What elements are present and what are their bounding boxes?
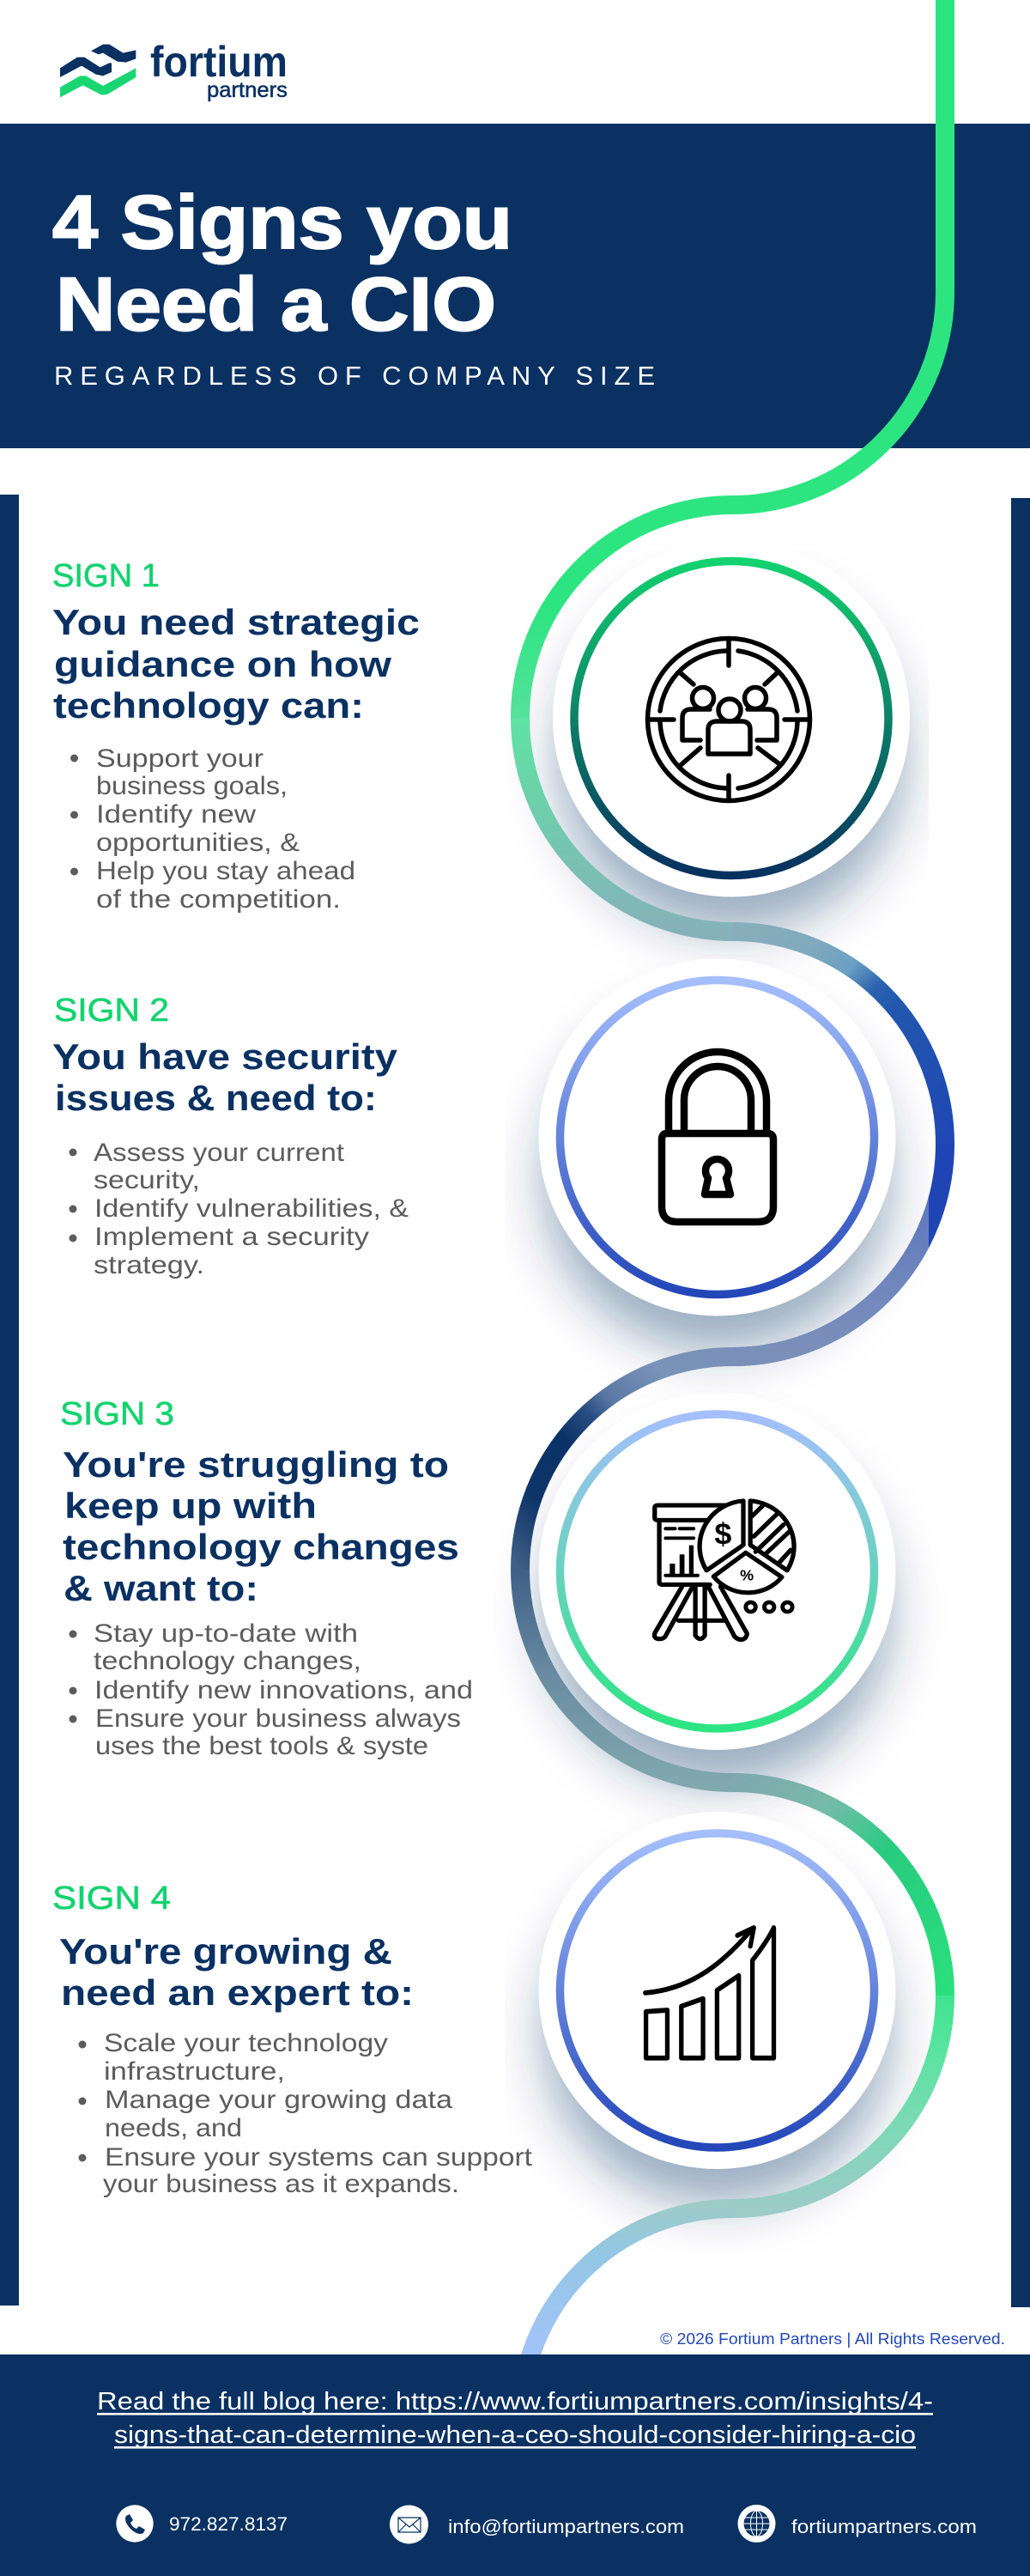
panel: sign 4 <box>52 1812 896 2198</box>
copyright note: © 2026 Fortium Partners | All Rights Reserved. <box>660 2330 1005 2348</box>
sign 1 bullet list: of the competition. <box>96 885 341 914</box>
logo <box>60 38 288 102</box>
icon: phone <box>116 2505 154 2543</box>
icon: presentation board with pie chart: % <box>740 1567 754 1584</box>
contact: phone <box>116 2505 288 2543</box>
title: 4 Signs you <box>52 179 512 264</box>
sign 3 bullet list: Stay up-to-date with <box>94 1619 358 1648</box>
sign 1 bullet list: Help you stay ahead <box>96 857 355 885</box>
sign 4 heading: need an expert to: <box>61 1972 414 2013</box>
sign 2 bullet list: strategy. <box>94 1251 204 1279</box>
sign 3 bullet list: technology changes, <box>94 1647 361 1675</box>
icon: padlock <box>662 1052 773 1222</box>
sign 3 heading <box>63 1444 459 1608</box>
sign 4 circle badge <box>539 1812 896 2169</box>
icon: presentation board with pie chart: $ <box>714 1518 732 1551</box>
contact: email: info@fortiumpartners.com <box>448 2516 684 2537</box>
sign 3 heading: & want to: <box>64 1568 258 1608</box>
sign 4 heading: You're growing & <box>59 1931 392 1971</box>
sign 1 bullet list <box>70 744 355 914</box>
sign 2 heading: You have security <box>52 1036 398 1077</box>
icon: envelope <box>390 2506 428 2543</box>
sign 1 bullet list: business goals, <box>96 772 288 800</box>
sign 2 bullet list: security, <box>94 1166 200 1194</box>
sign 4 label: SIGN 4 <box>52 1880 171 1917</box>
sign 3 bullet list <box>69 1619 473 1760</box>
panel: sign 2 <box>52 958 896 1315</box>
sign 3 circle badge <box>539 1393 896 1750</box>
sign 1 heading: You need strategic <box>52 602 420 642</box>
sign 1 bullet list: Identify new <box>96 800 256 829</box>
contact: website <box>738 2505 977 2543</box>
sign 1 bullet list: Support your <box>96 744 264 773</box>
sign 4 bullet list: Manage your growing data <box>105 2086 452 2114</box>
sign 2 bullet list: Assess your current <box>94 1139 345 1167</box>
right side bar <box>1011 498 1030 2307</box>
icon: target with people <box>647 639 810 800</box>
sign 2 bullet list: Implement a security <box>94 1223 369 1251</box>
sign 3 label: SIGN 3 <box>60 1396 174 1432</box>
blog link: Read the full blog here: https://www.fortiumpartners.com/insights/4- <box>97 2388 933 2415</box>
sign 4 bullet list: Ensure your systems can support <box>105 2143 533 2172</box>
logo mark <box>60 45 136 97</box>
sign 2 circle badge <box>539 958 896 1315</box>
sign 2 heading <box>52 1036 398 1118</box>
sign 4 heading <box>59 1931 414 2013</box>
panel: sign 3 <box>60 1393 896 1760</box>
sign 4 bullet list <box>79 2029 533 2198</box>
sign 1 circle badge <box>553 539 910 896</box>
blog link: signs-that-can-determine-when-a-ceo-should-consider-hiring-a-cio <box>114 2421 916 2449</box>
sign 2 label: SIGN 2 <box>54 993 169 1029</box>
footer band <box>0 2354 1030 2576</box>
title: Need a CIO <box>56 261 496 347</box>
panel: sign 1 <box>52 539 910 914</box>
winding gradient path <box>520 0 945 2421</box>
sign 4 bullet list: infrastructure, <box>104 2057 285 2086</box>
title <box>52 179 512 347</box>
blog link <box>97 2388 933 2449</box>
contact: email <box>390 2506 684 2543</box>
sign 3 bullet list: uses the best tools & syste <box>95 1732 428 1760</box>
sign 1 label: SIGN 1 <box>52 558 160 594</box>
sign 2 heading: issues & need to: <box>55 1078 377 1118</box>
sign 1 heading <box>52 602 420 726</box>
sign 4 bullet list: your business as it expands. <box>103 2170 459 2198</box>
sign 4 bullet list: needs, and <box>105 2114 242 2142</box>
sign 3 bullet list: Ensure your business always <box>95 1704 461 1733</box>
sign 3 heading: technology changes <box>63 1527 459 1567</box>
circle drop shadows <box>544 586 905 2205</box>
left side bar <box>0 495 19 2306</box>
logo wordmark: fortium <box>150 38 288 86</box>
sign 4 bullet list: Scale your technology <box>104 2029 388 2057</box>
header band <box>0 124 1030 448</box>
subtitle: REGARDLESS OF COMPANY SIZE <box>54 361 655 391</box>
sign 3 bullet list: Identify new innovations, and <box>94 1676 473 1704</box>
sign 1 bullet list: opportunities, & <box>96 829 300 857</box>
contact: website: fortiumpartners.com <box>791 2516 977 2537</box>
sign 2 bullet list <box>69 1139 409 1279</box>
sign 1 heading: guidance on how <box>54 644 391 684</box>
sign 3 heading: keep up with <box>64 1485 317 1526</box>
sign 1 heading: technology can: <box>53 685 364 726</box>
icon: presentation board with pie chart <box>654 1501 794 1639</box>
icon: growth bar chart <box>645 1928 773 2058</box>
icon: globe <box>738 2505 776 2543</box>
contact: phone: 972.827.8137 <box>169 2513 288 2535</box>
sign 3 heading: You're struggling to <box>63 1444 449 1485</box>
sign 2 bullet list: Identify vulnerabilities, & <box>94 1194 409 1223</box>
logo wordmark: partners <box>207 78 288 102</box>
